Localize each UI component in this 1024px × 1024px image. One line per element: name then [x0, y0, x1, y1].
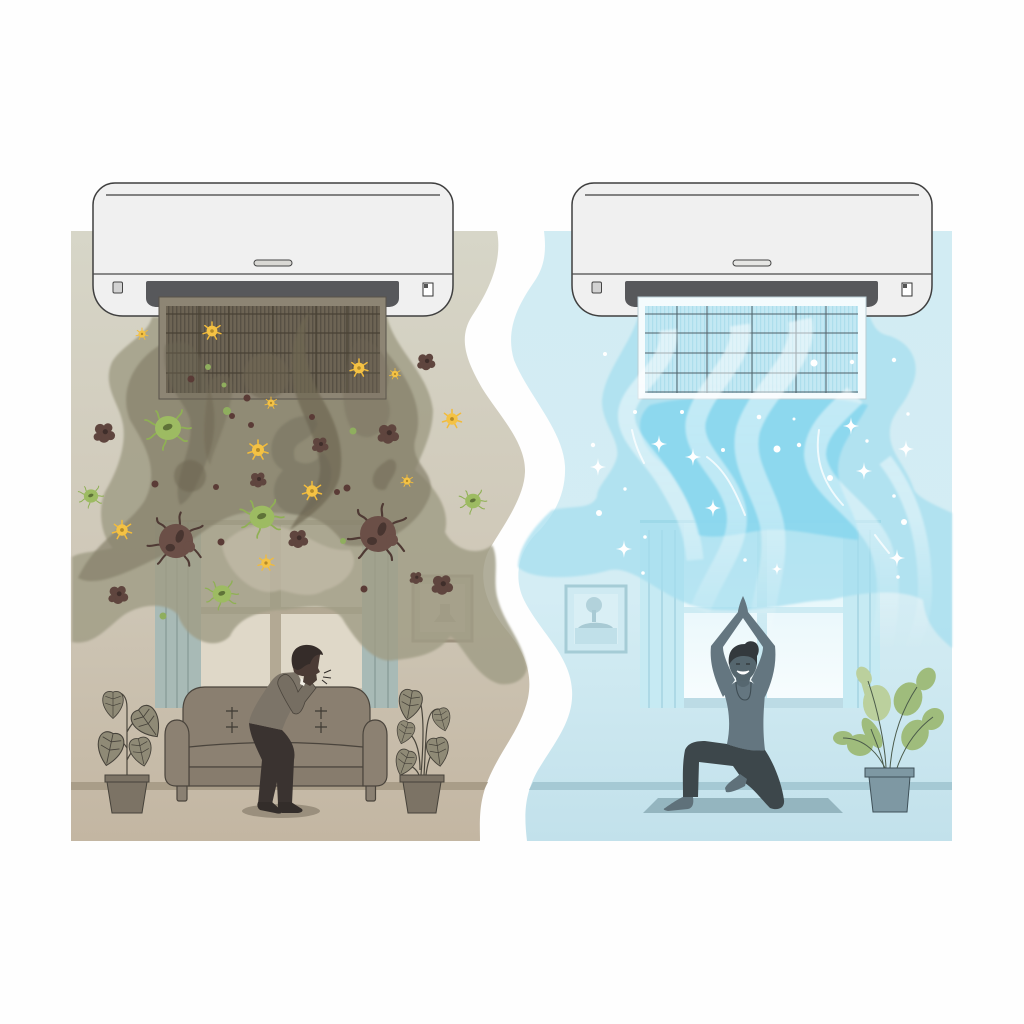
- air layers: clean room deep blue: [640, 395, 868, 540]
- smog streams over filter: [164, 312, 396, 530]
- person coughing: [242, 645, 331, 818]
- sparkles and particles: [590, 352, 914, 579]
- air highlight lines: [632, 430, 889, 553]
- sofa: [165, 687, 387, 801]
- smog cloud: inner layer: [78, 345, 431, 581]
- white air streams: [626, 320, 925, 665]
- plant: wilted left: [94, 691, 168, 813]
- germs: [78, 322, 487, 620]
- panel: clean room background: [511, 231, 952, 841]
- baseboard: clean room: [529, 782, 952, 790]
- air conditioner: dirty: [93, 183, 453, 316]
- plant: healthy: [833, 664, 949, 812]
- picture frame: clean room: [566, 586, 626, 652]
- air conditioner: clean: [572, 183, 932, 316]
- light gap showing window: [222, 525, 354, 595]
- plant: wilted right: [391, 688, 454, 813]
- yoga mat: [643, 798, 843, 813]
- window: dirty room: [155, 520, 398, 708]
- person doing yoga: [664, 596, 784, 811]
- picture frame: dirty room: [413, 576, 472, 641]
- dirty filter: [159, 297, 386, 399]
- clean filter: [638, 297, 866, 399]
- baseboard: dirty room: [71, 782, 488, 790]
- air layers: clean room mid blue: [518, 317, 952, 648]
- smog cloud: outer layer: [72, 317, 527, 684]
- panel: dirty room background: [71, 231, 529, 841]
- window: clean room: [640, 520, 881, 708]
